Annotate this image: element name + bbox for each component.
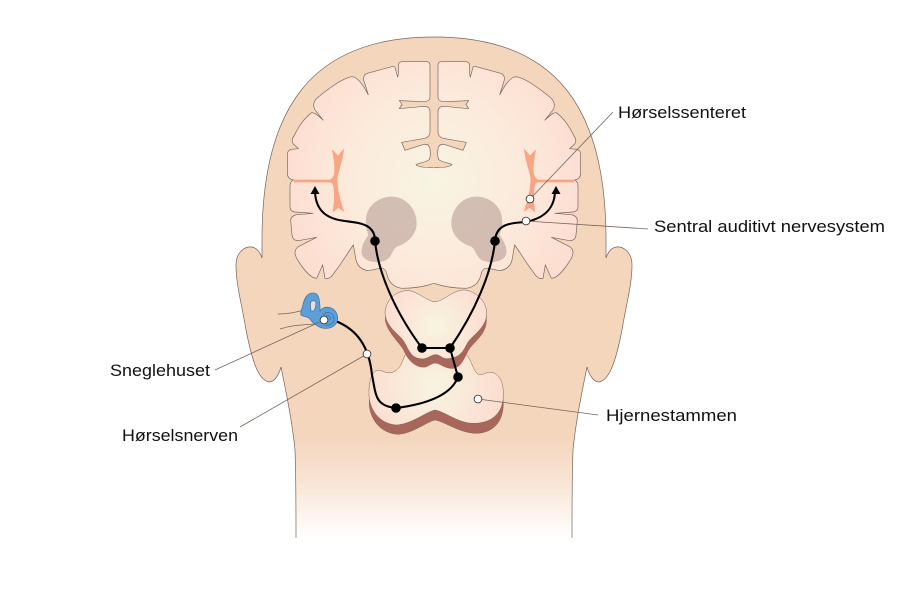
right arrowhead bbox=[552, 186, 560, 194]
right thalamus bbox=[451, 197, 506, 262]
left ventricle bbox=[294, 148, 344, 213]
leader lines bbox=[215, 112, 648, 427]
relay nuclei bbox=[370, 236, 500, 413]
label markers bbox=[320, 195, 534, 403]
left arrowhead bbox=[310, 186, 320, 194]
cochlea body bbox=[301, 293, 338, 328]
left hemisphere bbox=[287, 62, 435, 288]
lower brainstem section bbox=[369, 355, 503, 434]
left cortical pathway bbox=[315, 192, 422, 348]
label: Hjernestammen: Hjernestammen bbox=[606, 406, 737, 425]
cochlear spiral bbox=[323, 312, 334, 325]
brainstem bbox=[369, 290, 503, 434]
right ventricle bbox=[524, 148, 574, 213]
cochlea bbox=[278, 293, 338, 329]
label: Sneglehuset: Sneglehuset bbox=[110, 361, 210, 380]
nerve fibres bbox=[278, 310, 314, 329]
label: Hørselssenteret: Hørselssenteret bbox=[618, 103, 746, 122]
right hemisphere bbox=[433, 62, 581, 288]
head shape with ears and neck bbox=[236, 37, 632, 538]
brain bbox=[287, 62, 581, 288]
upper brainstem section bbox=[385, 290, 487, 369]
right cortical pathway bbox=[450, 192, 555, 348]
label: Sentral auditivt nervesystem: Sentral auditivt nervesystem bbox=[654, 217, 885, 236]
auditory pathway bbox=[315, 192, 555, 408]
midline connection bbox=[422, 348, 458, 377]
left thalamus bbox=[362, 197, 417, 262]
semicircular canal bbox=[310, 301, 316, 311]
arrowheads bbox=[310, 186, 560, 194]
lower brainstem pathway bbox=[338, 322, 458, 408]
label: Hørselsnerven: Hørselsnerven bbox=[122, 426, 238, 445]
